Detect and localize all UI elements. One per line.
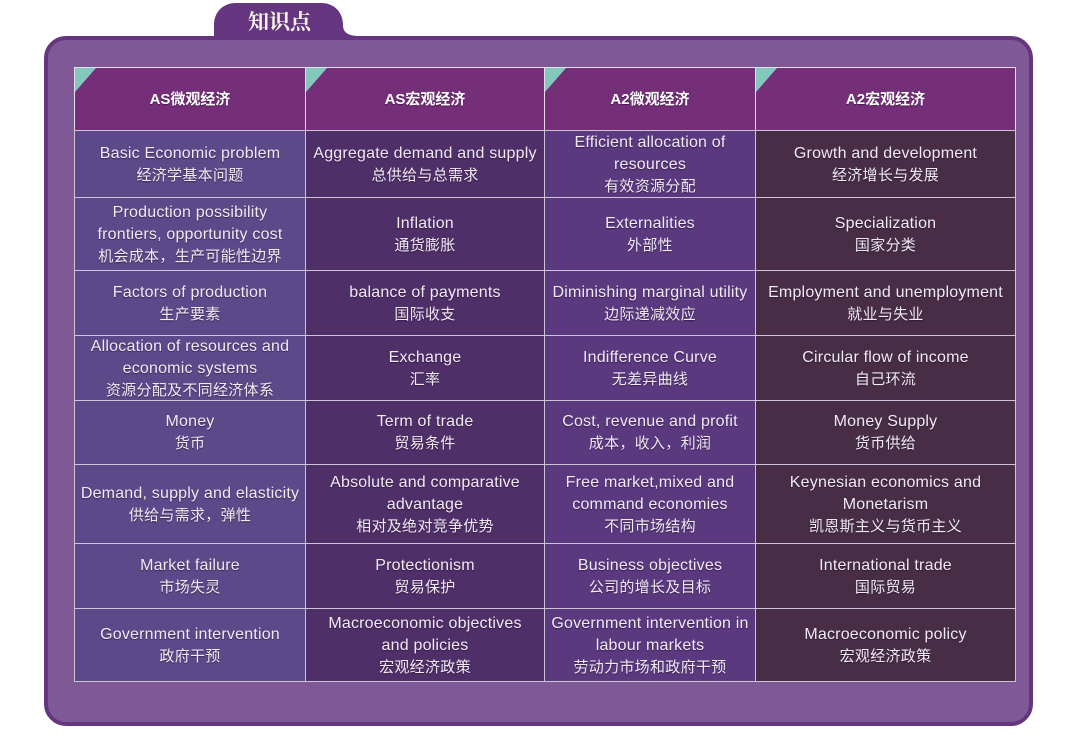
row 1 cell 2: Aggregate demand and supply	[313, 144, 537, 162]
row 4 cell 2: Exchange	[389, 348, 461, 366]
row 6 cell 3	[544, 464, 756, 544]
row 6 cell 2: advantage	[387, 496, 463, 512]
row 6 cell 1	[74, 464, 306, 544]
row 4 cell 4: 自己环流	[855, 370, 916, 388]
row 5 cell 3: Cost, revenue and profit	[562, 413, 738, 430]
row 3 cell 4: Employment and unemployment	[768, 284, 1003, 300]
row 8 cell 3: Government intervention in	[551, 614, 749, 632]
row 6 cell 3: 不同市场结构	[604, 518, 696, 534]
header: A2微观经济	[544, 67, 756, 131]
row 5 cell 1: Money	[165, 413, 215, 430]
row 1 cell 4: 经济增长与发展	[832, 166, 939, 184]
row 1 cell 2: 总供给与总需求	[371, 166, 479, 184]
row 4 cell 2	[305, 335, 545, 401]
row 4 cell 1: economic systems	[123, 360, 257, 376]
header: AS微观经济: AS微观经济	[150, 91, 230, 108]
row 6 cell 1: 供给与需求，弹性	[129, 506, 251, 524]
row 2 cell 4: 国家分类	[855, 236, 916, 254]
row 2 cell 3	[544, 197, 756, 271]
row 5 cell 3	[544, 400, 756, 465]
row 7 cell 4: International trade	[819, 556, 952, 574]
row 4 cell 4: Circular flow of income	[802, 348, 969, 366]
row 6 cell 1: Demand, supply and elasticity	[81, 484, 299, 502]
row 7 cell 3: 公司的增长及目标	[589, 578, 711, 596]
row 8 cell 2: and policies	[382, 636, 468, 654]
row 5 cell 3: 成本，收入，利润	[589, 435, 711, 452]
row 5 cell 1: 货币	[175, 435, 205, 452]
row 5 cell 4: 货币供给	[855, 435, 916, 452]
header: A2宏观经济	[755, 67, 1016, 131]
row 2 cell 4: Specialization	[835, 214, 936, 232]
row 7 cell 2	[305, 543, 545, 609]
row 3 cell 4	[755, 270, 1016, 336]
row 8 cell 2	[305, 608, 545, 682]
row 8 cell 4	[755, 608, 1016, 682]
row 4 cell 1: 资源分配及不同经济体系	[106, 382, 274, 398]
row 2 cell 1	[74, 197, 306, 271]
row 1 cell 1: Basic Economic problem	[100, 144, 280, 162]
row 3 cell 1: Factors of production	[113, 284, 267, 300]
header: AS微观经济	[74, 67, 306, 131]
row 8 cell 1: 政府干预	[159, 648, 221, 664]
row 2 cell 4	[755, 197, 1016, 271]
row 1 cell 3: 有效资源分配	[604, 178, 696, 194]
row 7 cell 4: 国际贸易	[855, 578, 916, 596]
row 5 cell 2: 贸易条件	[394, 435, 456, 452]
row 7 cell 3	[544, 543, 756, 609]
row 8 cell 2: 宏观经济政策	[379, 658, 471, 676]
row 1 cell 4: Growth and development	[794, 144, 977, 162]
row 1 cell 4	[755, 130, 1016, 198]
row 2 cell 3: Externalities	[605, 214, 695, 232]
row 1 cell 1	[74, 130, 306, 198]
row 8 cell 3	[544, 608, 756, 682]
row 8 cell 1: Government intervention	[100, 626, 280, 642]
row 4 cell 1: Allocation of resources and	[91, 338, 289, 354]
row 1 cell 1: 经济学基本问题	[136, 166, 244, 184]
row 2 cell 1: frontiers, opportunity cost	[97, 226, 283, 242]
row 5 cell 2: Term of trade	[377, 413, 473, 430]
tab title: 知识点	[248, 10, 311, 34]
row 5 cell 1	[74, 400, 306, 465]
tab: 知识点	[214, 3, 357, 36]
row 2 cell 2: Inflation	[396, 214, 454, 232]
row 4 cell 2: 汇率	[410, 370, 440, 388]
header: A2微观经济: A2微观经济	[610, 91, 690, 108]
row 1 cell 3: resources	[614, 156, 686, 172]
row 6 cell 4	[755, 464, 1016, 544]
row 3 cell 3	[544, 270, 756, 336]
row 2 cell 3: 外部性	[627, 236, 673, 254]
row 6 cell 4: 凯恩斯主义与货币主义	[809, 518, 962, 534]
row 8 cell 2: Macroeconomic objectives	[328, 614, 522, 632]
header: AS宏观经济: AS宏观经济	[385, 91, 465, 108]
row 7 cell 3: Business objectives	[578, 556, 722, 574]
row 1 cell 2	[305, 130, 545, 198]
row 6 cell 3: command economies	[572, 496, 728, 512]
header: AS宏观经济	[305, 67, 545, 131]
row 4 cell 4	[755, 335, 1016, 401]
row 4 cell 3	[544, 335, 756, 401]
row 6 cell 4: Monetarism	[843, 496, 928, 512]
row 6 cell 4: Keynesian economics and	[790, 474, 981, 490]
row 5 cell 4	[755, 400, 1016, 465]
row 3 cell 3: Diminishing marginal utility	[552, 284, 748, 300]
row 8 cell 1	[74, 608, 306, 682]
row 7 cell 1: 市场失灵	[159, 578, 221, 596]
row 7 cell 1: Market failure	[140, 556, 240, 574]
row 4 cell 1	[74, 335, 306, 401]
row 4 cell 3: Indifference Curve	[583, 348, 717, 366]
row 3 cell 4: 就业与失业	[847, 306, 924, 322]
row 2 cell 1: Production possibility	[113, 204, 267, 220]
row 1 cell 3	[544, 130, 756, 198]
row 6 cell 2	[305, 464, 545, 544]
row 5 cell 4: Money Supply	[834, 413, 937, 430]
row 3 cell 1	[74, 270, 306, 336]
row 8 cell 3: 劳动力市场和政府干预	[573, 658, 726, 676]
row 8 cell 4: 宏观经济政策	[840, 648, 931, 664]
row 6 cell 2: Absolute and comparative	[330, 474, 520, 490]
row 5 cell 2	[305, 400, 545, 465]
row 3 cell 2: 国际收支	[394, 306, 456, 322]
row 1 cell 3: Efficient allocation of	[574, 134, 726, 150]
header: A2宏观经济: A2宏观经济	[846, 91, 925, 108]
row 7 cell 1	[74, 543, 306, 609]
row 2 cell 2	[305, 197, 545, 271]
row 3 cell 2	[305, 270, 545, 336]
row 7 cell 2: Protectionism	[375, 556, 475, 574]
row 3 cell 1: 生产要素	[159, 306, 221, 322]
row 8 cell 4: Macroeconomic policy	[804, 626, 967, 642]
row 6 cell 2: 相对及绝对竞争优势	[356, 518, 494, 534]
row 3 cell 3: 边际递减效应	[604, 306, 696, 322]
row 4 cell 3: 无差异曲线	[612, 370, 688, 388]
row 8 cell 3: labour markets	[596, 636, 704, 654]
row 7 cell 4	[755, 543, 1016, 609]
row 6 cell 3: Free market,mixed and	[566, 474, 734, 490]
row 7 cell 2: 贸易保护	[394, 578, 456, 596]
row 2 cell 1: 机会成本，生产可能性边界	[98, 248, 282, 264]
row 3 cell 2: balance of payments	[349, 284, 501, 300]
row 2 cell 2: 通货膨胀	[394, 236, 456, 254]
